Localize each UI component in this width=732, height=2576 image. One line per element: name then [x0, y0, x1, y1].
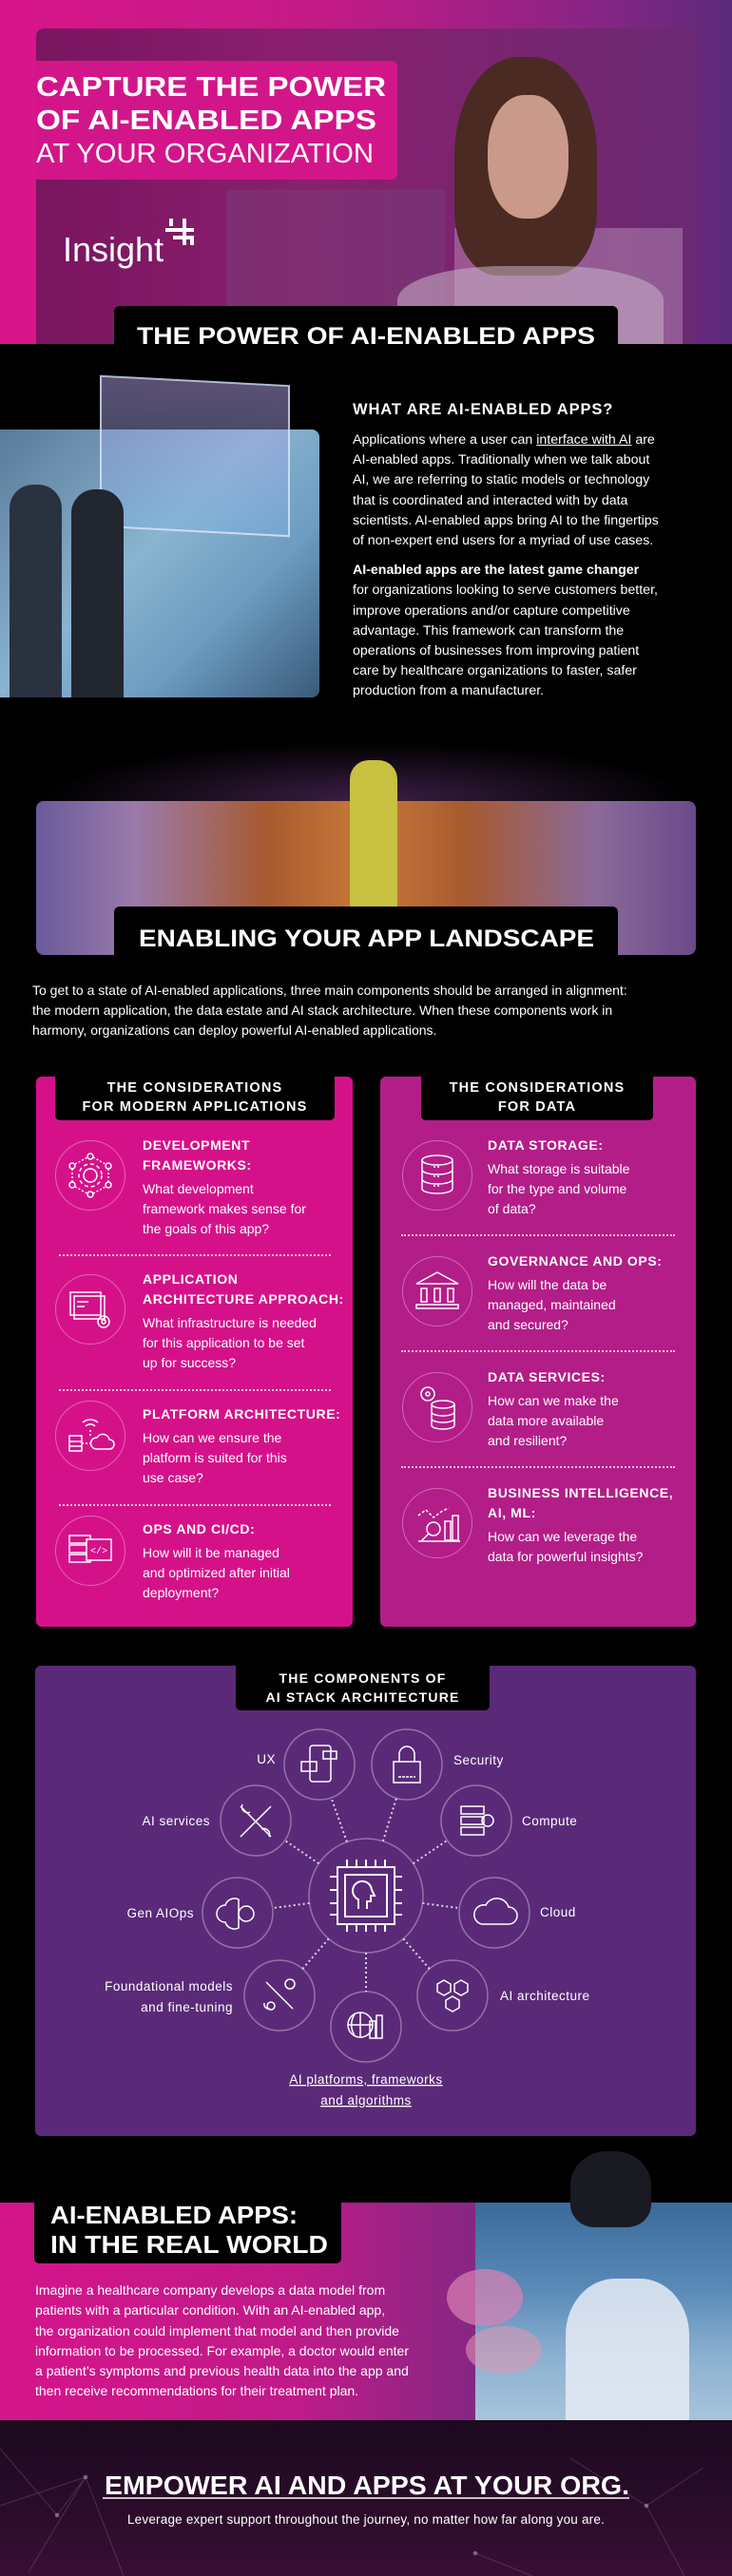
item: platform architecture [55, 1401, 340, 1485]
labels: AI architecture [500, 1989, 590, 2003]
labels: Foundational models [105, 1979, 233, 1994]
item: business intelligence: How can we leverage the [488, 1529, 637, 1544]
footer [0, 2420, 732, 2576]
CTA subtitle: Leverage expert support throughout the journey, no matter how far along you are. [127, 2512, 605, 2527]
photo: warehouse [36, 749, 696, 955]
icons: outer [217, 1746, 517, 2038]
photo: scientist [475, 2203, 732, 2420]
text: what are AI-enabled apps: care by healthcare organizations to faster, safer [353, 663, 637, 678]
diagram: AI stack [105, 1728, 590, 2108]
item: development frameworks: FRAMEWORKS: [143, 1157, 252, 1173]
intro text: To get to a state of AI-enabled applications, three main components should be arranged in alignment: [32, 983, 627, 998]
item: platform architecture: platform is suited for this [143, 1450, 287, 1465]
text: what are AI-enabled apps: for organizations looking to serve customers better, [353, 582, 658, 598]
text: what are AI-enabled apps: scientists. AI-enabled apps bring AI to the fingertips [353, 513, 659, 528]
item: development frameworks: the goals of this app? [143, 1221, 269, 1236]
labels: UX [257, 1752, 276, 1766]
labels: Cloud [540, 1905, 576, 1919]
item: data services: and resilient? [488, 1433, 567, 1448]
item: application architecture approach: APPLICATION [143, 1271, 238, 1287]
item: business intelligence [402, 1485, 673, 1564]
item: data storage [402, 1137, 629, 1216]
labels: Compute [522, 1814, 577, 1828]
item: application architecture approach: What infrastructure is needed [143, 1315, 317, 1330]
item: ops and ci/cd: and optimized after initial [143, 1565, 290, 1580]
heading box [34, 2203, 341, 2263]
title box: CAPTURE THE POWER [36, 72, 386, 103]
item: development frameworks: What development [143, 1181, 254, 1196]
tab heading [55, 1077, 335, 1120]
item: business intelligence: AI, ML: [488, 1505, 536, 1520]
text: what are AI-enabled apps: improve operations and/or capture competitive [353, 603, 630, 619]
item: governance and ops: How will the data be [488, 1277, 607, 1292]
tab heading: AI STACK ARCHITECTURE [265, 1689, 460, 1705]
item: application architecture approach [55, 1271, 344, 1370]
item: data storage: What storage is suitable [488, 1161, 629, 1176]
item: business intelligence: data for powerful insights? [488, 1549, 643, 1564]
item: ops and ci/cd: OPS AND CI/CD: [143, 1521, 255, 1536]
icon: chip head [330, 1860, 402, 1932]
item: governance and ops: and secured? [488, 1317, 568, 1332]
heading box: IN THE REAL WORLD [50, 2230, 328, 2259]
text: patients with a particular condition. With an AI-enabled app, [35, 2302, 385, 2318]
item: governance and ops [402, 1253, 663, 1332]
logo: Insight [63, 219, 194, 269]
item: development frameworks [55, 1137, 306, 1236]
panel: components of AI stack architecture [35, 1666, 696, 2136]
text: a patient’s symptoms and previous health data into the app and [35, 2363, 409, 2378]
text: information to be processed. For example, a doctor would enter [35, 2343, 409, 2358]
text: what are AI-enabled apps: Applications where a user can interface with AI are [353, 432, 655, 448]
labels [105, 1752, 590, 2108]
item: application architecture approach: ARCHITECTURE APPROACH: [143, 1291, 344, 1307]
item: data storage: for the type and volume [488, 1181, 626, 1196]
tab heading: THE CONSIDERATIONS [450, 1080, 625, 1096]
intro text [32, 983, 627, 1038]
item: data storage: DATA STORAGE: [488, 1137, 604, 1153]
item: data storage: of data? [488, 1201, 536, 1216]
tab heading: THE CONSIDERATIONS [107, 1080, 282, 1096]
text: what are AI-enabled apps: of non-expert end users for a myriad of use cases. [353, 533, 653, 548]
item: application architecture approach: for this application to be set [143, 1335, 304, 1350]
heading: the power of AI-enabled apps: THE POWER OF AI-ENABLED APPS [137, 323, 595, 350]
text: what are AI-enabled apps: production from a manufacturer. [353, 683, 544, 698]
item: platform architecture: PLATFORM ARCHITECTURE: [143, 1406, 340, 1422]
section: AI-enabled apps in the real world [0, 2203, 732, 2420]
item: platform architecture: use case? [143, 1470, 203, 1485]
text: what are AI-enabled apps: AI, we are referring to static models or technology [353, 472, 649, 487]
panel: considerations for modern applications [36, 1077, 353, 1627]
text: what are AI-enabled apps [353, 401, 659, 698]
text: what are AI-enabled apps: AI-enabled apps. Traditionally when we talk about [353, 452, 649, 467]
hero background [0, 0, 732, 344]
CTA heading: EMPOWER AI AND APPS AT YOUR ORG. [105, 2471, 629, 2500]
tab heading: THE COMPONENTS OF [279, 1670, 446, 1686]
intro text: harmony, organizations can deploy powerful AI-enabled applications. [32, 1022, 436, 1038]
title box [36, 61, 397, 180]
text: what are AI-enabled apps: AI-enabled apps are the latest game changer [353, 563, 639, 578]
labels: AI platforms, frameworks [289, 2072, 443, 2087]
item: development frameworks: framework makes sense for [143, 1201, 306, 1216]
text: the organization could implement that model and then provide [35, 2323, 399, 2338]
item: data services: How can we make the [488, 1393, 619, 1408]
item: ops and ci/cd: </> [90, 1546, 107, 1557]
intro text: the modern application, the data estate and AI stack architecture. When these components work in [32, 1002, 612, 1018]
labels: and fine-tuning [141, 2000, 233, 2014]
text: what are AI-enabled apps: operations of businesses from improving patient [353, 643, 639, 658]
tab heading: FOR DATA [498, 1099, 576, 1115]
photo: scientist head [570, 2151, 651, 2227]
item: data services [402, 1369, 619, 1448]
labels: Gen AIOps [126, 1906, 194, 1920]
text [35, 2282, 409, 2398]
tab heading [421, 1077, 653, 1120]
item: development frameworks: DEVELOPMENT [143, 1137, 250, 1153]
text: what are AI-enabled apps: that is coordinated and interacted with by data [353, 493, 627, 508]
title box: OF AI-ENABLED APPS [36, 105, 376, 136]
panel: considerations for data [380, 1077, 696, 1627]
tab heading [236, 1666, 490, 1710]
tab heading: FOR MODERN APPLICATIONS [82, 1099, 308, 1115]
text: Imagine a healthcare company develops a data model from [35, 2282, 385, 2298]
hero photo [36, 29, 696, 344]
heading: enabling your app landscape [114, 906, 618, 956]
item: governance and ops: GOVERNANCE AND OPS: [488, 1253, 663, 1269]
item: platform architecture: How can we ensure the [143, 1430, 281, 1445]
labels: AI services [142, 1814, 210, 1828]
item: application architecture approach: up for success? [143, 1355, 236, 1370]
labels: and algorithms [320, 2093, 412, 2108]
title box: AT YOUR ORGANIZATION [36, 139, 374, 169]
item: governance and ops: managed, maintained [488, 1297, 616, 1312]
logo: Insight: Insight [63, 230, 164, 269]
item: ops and ci/cd: deployment? [143, 1585, 219, 1600]
item: ops and ci/cd [55, 1516, 290, 1600]
labels: Security [453, 1753, 504, 1767]
heading: enabling your app landscape: ENABLING YOUR APP LANDSCAPE [139, 925, 594, 952]
text: what are AI-enabled apps: WHAT ARE AI-ENABLED APPS? [353, 401, 613, 418]
item: business intelligence: BUSINESS INTELLIGENCE, [488, 1485, 673, 1500]
item: data services: DATA SERVICES: [488, 1369, 606, 1384]
photo: engineers with hologram [0, 374, 319, 697]
text: what are AI-enabled apps: advantage. This framework can transform the [353, 623, 624, 639]
item: ops and ci/cd: How will it be managed [143, 1545, 279, 1560]
heading: the power of AI-enabled apps [114, 306, 618, 361]
item: data services: data more available [488, 1413, 604, 1428]
text: then receive recommendations for their treatment plan. [35, 2383, 358, 2398]
